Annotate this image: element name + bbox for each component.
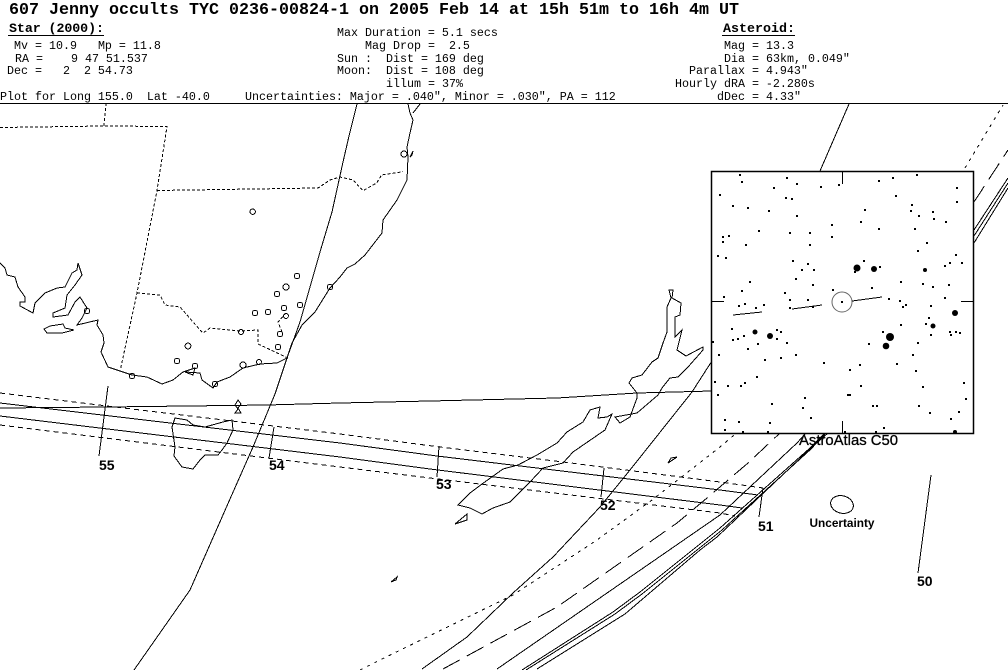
crosshair ticks — [711, 171, 974, 433]
event data block: Sun : Dist = 169 deg — [337, 52, 484, 66]
star data block: Star (2000): — [9, 22, 104, 37]
time ticks with minute labels: 51 — [758, 518, 774, 534]
event data block: illum = 37% — [386, 77, 463, 91]
horizontal reference line — [0, 391, 712, 408]
star data block: Dec = 2 2 54.73 — [7, 64, 133, 78]
faint stars — [713, 175, 966, 432]
star data block: RA = 9 47 51.537 — [15, 52, 148, 66]
time ticks with minute labels — [99, 386, 933, 589]
Kangaroo Island — [44, 324, 74, 333]
asteroid data block: Mag = 13.3 — [724, 39, 794, 53]
star data block — [7, 22, 161, 78]
event data block — [337, 26, 498, 91]
event data block: Mag Drop = 2.5 — [365, 39, 470, 53]
bright stars — [752, 264, 958, 434]
motion track segments — [733, 297, 882, 315]
Earth limb line — [134, 104, 357, 670]
asteroid data block: Hourly dRA = -2.280s — [675, 77, 815, 91]
asteroid data block: Parallax = 4.943" — [689, 64, 808, 78]
event data block: Moon: Dist = 108 deg — [337, 64, 484, 78]
asteroid data block — [675, 22, 850, 104]
uncertainty ellipse and label: Uncertainty — [810, 517, 875, 530]
plot location: Plot for Long 155.0 Lat -40.0 — [0, 90, 210, 104]
Australian coastline — [0, 104, 420, 388]
time ticks with minute labels: 52 — [600, 497, 616, 513]
header rule — [0, 103, 1008, 104]
New Zealand South Island — [458, 407, 612, 514]
time ticks with minute labels: 54 — [269, 457, 285, 473]
uncertainty ellipse and label — [810, 493, 875, 530]
map: Australia and New Zealand — [0, 104, 703, 582]
King and Flinders islands — [235, 151, 413, 413]
occultation path: limits and centre band — [0, 393, 763, 516]
time ticks with minute labels: 50 — [917, 573, 933, 589]
uncertainties line: Uncertainties: Major = .040", Minor = .030", PA = 112 — [245, 90, 616, 104]
asteroid data block: Asteroid: — [723, 22, 795, 37]
time ticks with minute labels: 55 — [99, 457, 115, 473]
inset caption: AstroAtlas C50 — [799, 433, 898, 449]
state borders — [0, 104, 403, 369]
target star circle — [832, 292, 852, 312]
Tasmania — [172, 418, 233, 469]
asteroid data block: dDec = 4.33" — [717, 90, 801, 104]
time ticks with minute labels: 53 — [436, 476, 452, 492]
asteroid data block: Dia = 63km, 0.049" — [724, 52, 850, 66]
city markers — [84, 151, 407, 387]
star data block: Mv = 10.9 Mp = 11.8 — [14, 39, 161, 53]
title: 607 Jenny occults TYC 0236-00824-1 on 2005 Feb 14 at 15h 51m to 16h 4m UT — [9, 1, 739, 20]
event data block: Max Duration = 5.1 secs — [337, 26, 498, 40]
curved visibility limit lines — [360, 104, 1008, 670]
New Zealand North Island — [615, 290, 703, 423]
star chart inset — [711, 171, 974, 434]
small islands — [391, 457, 677, 582]
